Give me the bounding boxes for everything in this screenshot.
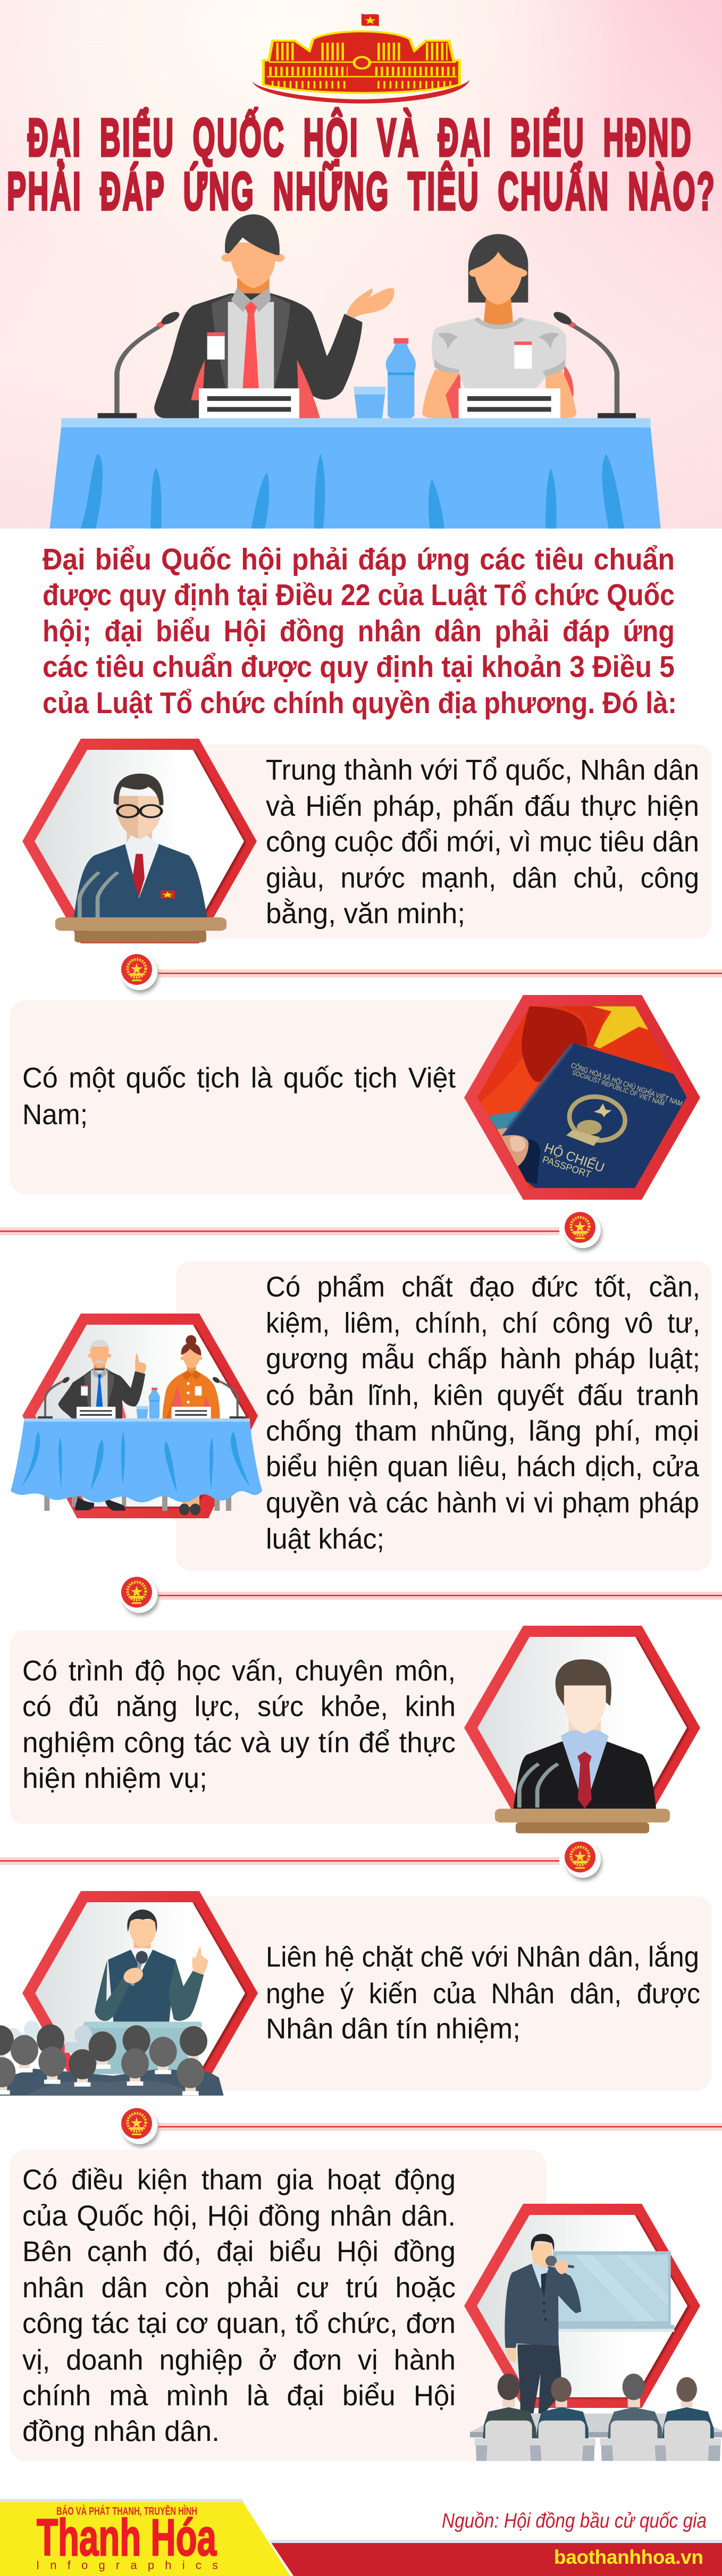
- intro paragraph: các tiêu chuẩn được quy định tại khoản 3 Điều 5: [43, 650, 675, 684]
- criterion text: biểu hiện quan liêu, hách dịch, cửa: [266, 1451, 700, 1483]
- divider 2: [0, 1212, 602, 1251]
- criterion text: kiệm, liêm, chính, chí công vô tư,: [266, 1307, 700, 1339]
- male delegate: [58, 1340, 146, 1418]
- panel: criterion 5 connection with people: [0, 1891, 711, 2096]
- table with blue cloth: [11, 1418, 262, 1502]
- panel background: [159, 1896, 711, 2090]
- panel background: [10, 1630, 542, 1825]
- icon: right microphone: [551, 310, 636, 419]
- criterion text: nhân dân còn phải cư trú hoặc: [22, 2272, 456, 2304]
- criterion text: của Quốc hội, Hội đồng nhân dân.: [22, 2200, 456, 2232]
- criterion text: quyền và các hành vi vi phạm pháp: [266, 1487, 699, 1519]
- illustration: two delegates at a blue table: [50, 214, 661, 529]
- red footer band: [266, 2540, 722, 2576]
- figure: presenter at whiteboard with seated audience: [470, 2234, 722, 2461]
- panel: criterion 3 ethics: [11, 1261, 711, 1571]
- criterion text: luật khác;: [266, 1523, 384, 1555]
- hexagon frame: [464, 995, 700, 1200]
- criterion text: Có điều kiện tham gia hoạt động: [22, 2164, 456, 2196]
- title: [7, 108, 716, 221]
- criterion text: [266, 1941, 700, 2045]
- criterion text: Có phẩm chất đạo đức tốt, cần,: [266, 1271, 700, 1303]
- icon: parliament building logo with flag: [253, 14, 469, 104]
- criterion text: [266, 754, 699, 930]
- name card left: [199, 388, 299, 419]
- panel background: [176, 1261, 711, 1571]
- divider 1: [121, 954, 722, 993]
- hexagon frame: [464, 2204, 700, 2408]
- divider 3: [121, 1577, 722, 1616]
- icon: water glass: [354, 387, 386, 418]
- footer: [0, 2499, 722, 2576]
- figure: man in black suit at lectern: [495, 1659, 670, 1833]
- criterion text: hiện nhiệm vụ;: [22, 1762, 207, 1794]
- criterion text: Nam;: [22, 1099, 88, 1131]
- criterion text: có bản lĩnh, kiên quyết đấu tranh: [266, 1379, 699, 1411]
- criterion text: nghe ý kiến của Nhân dân, được: [266, 1978, 700, 2010]
- icon: right microphone: [212, 1376, 245, 1419]
- criterion text: gương mẫu chấp hành pháp luật;: [266, 1343, 700, 1375]
- figure: speaker with microphone and audience: [0, 1910, 224, 2096]
- picture: passport on national flag: CỘNG HÒA XÃ HỘI CHỦ NGHĨA VIỆT NAM: [570, 1060, 684, 1108]
- icon: left microphone: [98, 310, 182, 419]
- hexagon frame: [22, 1314, 258, 1518]
- criterion text: Bên cạnh đó, đại biểu Hội đồng: [22, 2236, 456, 2268]
- criterion text: Nhân dân tín nhiệm;: [266, 2013, 520, 2045]
- criterion text: Có một quốc tịch là quốc tịch Việt: [22, 1062, 456, 1094]
- presenter: [505, 2234, 581, 2413]
- water glass and bottle: [136, 1387, 160, 1418]
- female delegate: [422, 234, 576, 418]
- table with blue cloth: [50, 418, 661, 529]
- intro paragraph: [43, 542, 677, 720]
- name card right: [459, 388, 560, 419]
- website: baothanhhoa.vn: [554, 2546, 703, 2568]
- criterion text: có đủ năng lực, sức khỏe, kinh: [22, 1691, 456, 1722]
- criterion text: giàu, nước mạnh, dân chủ, công: [266, 862, 699, 894]
- criterion text: Trung thành với Tổ quốc, Nhân dân: [266, 754, 699, 786]
- female delegate: [163, 1335, 220, 1418]
- picture: passport on national flag: SOCIALIST REPUBLIC OF VIET NAM: [571, 1068, 666, 1107]
- panel background: [10, 2150, 546, 2461]
- divider 5: [121, 2108, 722, 2147]
- icon: left microphone: [38, 1376, 71, 1419]
- criterion text: công cuộc đổi mới, vì mục tiêu dân: [266, 826, 699, 858]
- panel: criterion 4 competence: [10, 1626, 700, 1833]
- panel: criterion 1 loyalty: [22, 739, 711, 943]
- divider 4: [0, 1842, 602, 1880]
- criterion text: Liên hệ chặt chẽ với Nhân dân, lắng: [266, 1941, 699, 1973]
- panel background: [10, 1000, 542, 1194]
- panel: criterion 2 nationality: [10, 995, 700, 1200]
- icon: water bottle: [386, 338, 416, 418]
- yellow logo plate: [0, 2499, 293, 2576]
- intro paragraph: Đại biểu Quốc hội phải đáp ứng các tiêu chuẩn: [43, 542, 675, 576]
- criterion text: và Hiến pháp, phấn đấu thực hiện: [266, 790, 699, 822]
- criterion text: [266, 1271, 700, 1555]
- panel background: [159, 745, 711, 939]
- figure: two delegates at table: [11, 1335, 262, 1515]
- whiteboard: [553, 2251, 674, 2332]
- logo text: Thanh Hóa: [37, 2508, 217, 2566]
- logo text: Infographics: [36, 2558, 218, 2572]
- table legs and shoes: [44, 1493, 231, 1515]
- criterion text: chính mà mình là đại biểu Hội: [22, 2380, 456, 2412]
- criterion text: vị, doanh nghiệp ở đơn vị hành: [22, 2344, 456, 2376]
- criterion text: [22, 1655, 456, 1794]
- name cards: [77, 1407, 211, 1418]
- criterion text: công tác tại cơ quan, tổ chức, đơn: [22, 2307, 456, 2339]
- figure: delegate with glasses at lectern: [55, 774, 226, 942]
- table and seated audience: [470, 2373, 722, 2461]
- logo text: [36, 2505, 218, 2572]
- picture: passport on national flag: PASSPORT: [541, 1154, 592, 1180]
- panel: criterion 6 conditions: [10, 2150, 722, 2461]
- criterion text: [22, 1062, 456, 1131]
- picture: passport on national flag: [475, 1005, 690, 1190]
- header background: [0, 0, 722, 529]
- criterion text: nghiệm công tác và uy tín để thực: [22, 1727, 456, 1759]
- criterion text: [22, 2164, 456, 2447]
- hexagon frame: [22, 1891, 258, 2095]
- hexagon frame: [22, 739, 257, 943]
- criterion text: chống tham nhũng, lãng phí, mọi: [266, 1415, 699, 1447]
- male delegate: [154, 214, 394, 418]
- speaker at lectern: [83, 1910, 208, 2074]
- picture: passport on national flag: HỘ CHIẾU: [542, 1140, 607, 1175]
- criterion text: bằng, văn minh;: [266, 898, 465, 930]
- criterion text: đồng nhân dân.: [22, 2415, 220, 2447]
- hexagon frame: [464, 1626, 700, 1830]
- logo text: BÁO VÀ PHÁT THANH, TRUYỀN HÌNH: [56, 2505, 197, 2518]
- criterion text: Có trình độ học vấn, chuyên môn,: [22, 1655, 456, 1687]
- audience: [0, 2020, 224, 2096]
